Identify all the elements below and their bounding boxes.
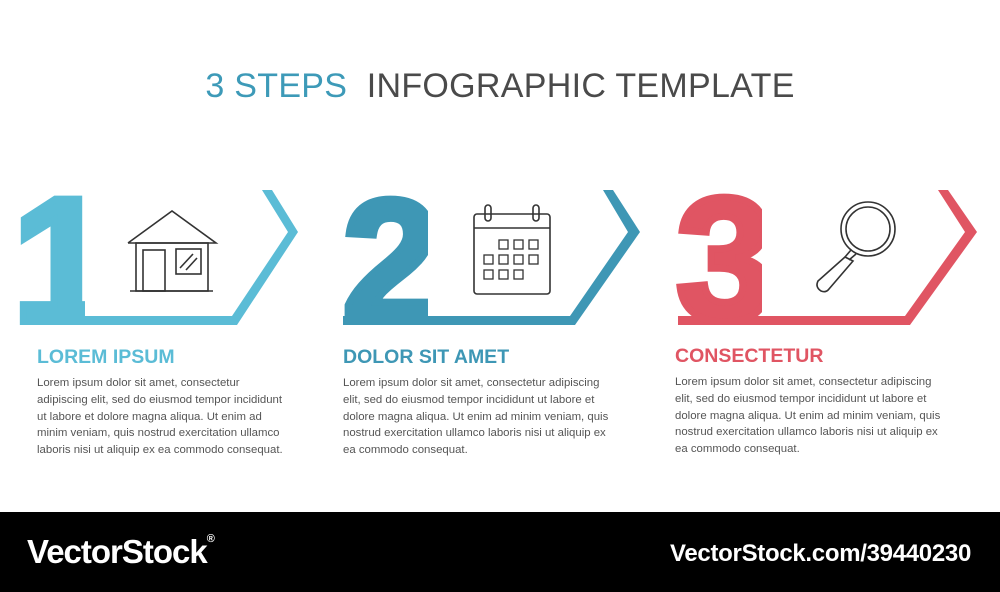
text 3: elit, sed do eiusmod tempor incididunt ut labore et	[675, 393, 926, 405]
text 1: adipiscing elit, sed do eiusmod tempor incididunt	[37, 394, 282, 406]
icon: magnifier	[817, 202, 895, 292]
footer bar	[0, 512, 1000, 592]
title: 3 STEPS INFOGRAPHIC TEMPLATE	[205, 67, 795, 105]
text 2: nostrud exercitation ullamco laboris nisi ut aliquip ex	[343, 427, 606, 439]
text 1: laboris nisi ut aliquip ex ea commodo consequat.	[37, 444, 283, 456]
icon: house	[128, 211, 216, 291]
text 1: minim veniam, quis nostrud exercitation ullamco	[37, 427, 279, 439]
text 3: dolore magna aliqua. Ut enim ad minim veniam, quis	[675, 410, 940, 422]
step 2	[343, 190, 640, 325]
text 3: ea commodo consequat.	[675, 443, 800, 455]
footer url: VectorStock.com/39440230	[670, 540, 971, 567]
text 1: ut labore et dolore magna aliqua. Ut enim ad	[37, 411, 262, 423]
step 1: 1	[12, 161, 112, 362]
steps graphic	[20, 190, 977, 325]
text 2: elit, sed do eiusmod tempor incididunt ut labore et	[343, 394, 594, 406]
heading 2: DOLOR SIT AMET	[343, 346, 509, 368]
footer logo: VectorStock®	[27, 533, 214, 570]
text 1: Lorem ipsum dolor sit amet, consectetur	[37, 377, 240, 389]
text 1	[37, 377, 283, 456]
step 1	[20, 190, 298, 325]
icon: calendar	[474, 205, 550, 294]
text 2: ea commodo consequat.	[343, 444, 468, 456]
heading 1: LOREM IPSUM	[37, 346, 175, 368]
step 2: 2	[342, 164, 440, 360]
text 2	[343, 377, 608, 456]
step 3	[676, 190, 977, 325]
text 2: dolore magna aliqua. Ut enim ad minim veniam, quis	[343, 411, 608, 423]
text 2: Lorem ipsum dolor sit amet, consectetur adipiscing	[343, 377, 599, 389]
text 3	[675, 376, 940, 455]
text 3: nostrud exercitation ullamco laboris nisi ut aliquip ex	[675, 426, 938, 438]
step 3: 3	[676, 162, 774, 358]
text 3: Lorem ipsum dolor sit amet, consectetur adipiscing	[675, 376, 931, 388]
heading 3: CONSECTETUR	[675, 345, 823, 367]
